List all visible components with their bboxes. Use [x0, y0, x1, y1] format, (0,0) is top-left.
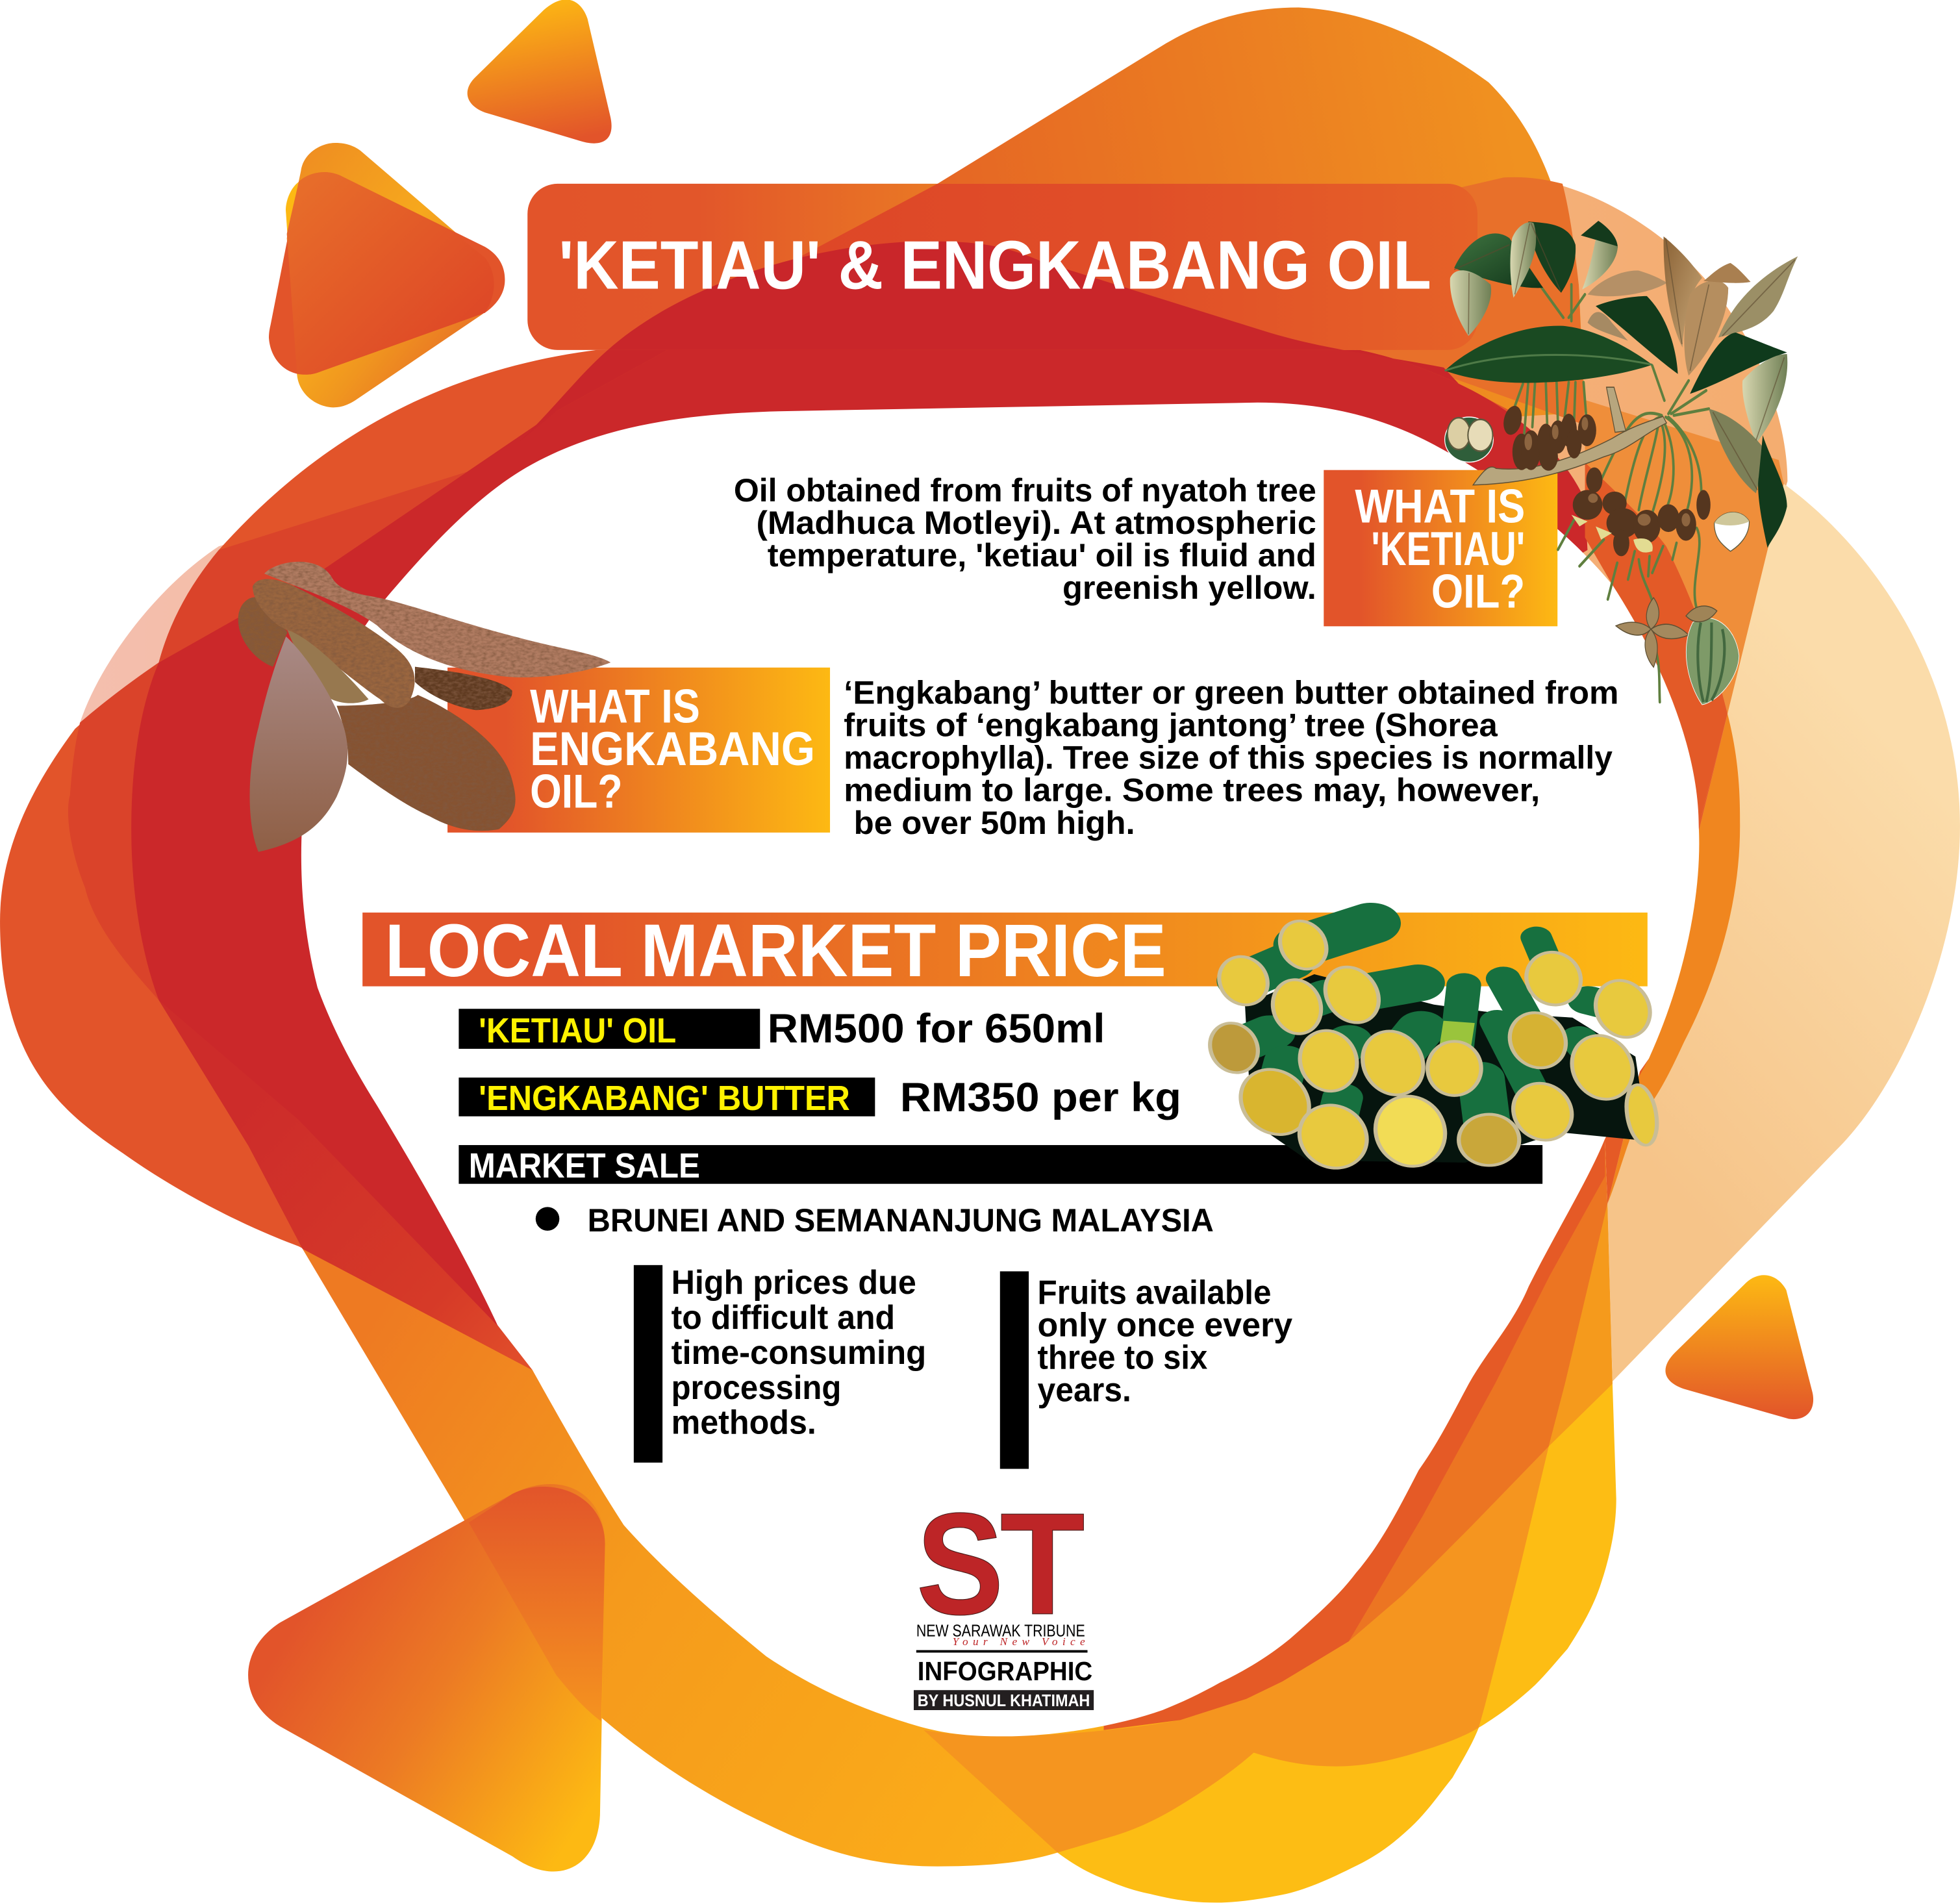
price row: engkabang butter: RM350 per kg: [900, 1075, 1181, 1120]
illustration: nyatoh tree branch: [1445, 221, 1798, 705]
note: fruit availability: years.: [1038, 1372, 1131, 1409]
background: band at straight edge: [1605, 714, 1728, 1204]
what is ketiau heading box: [1324, 470, 1557, 626]
triangle: upper left pair: [269, 143, 505, 407]
what is ketiau heading box: 'KETIAU': [1371, 523, 1525, 575]
what is engkabang text block: fruits of ‘engkabang jantong’ tree (Shorea: [844, 707, 1498, 744]
title bar: [527, 183, 1477, 350]
market sale bar: MARKET SALE: [469, 1146, 700, 1185]
what is ketiau text block: [734, 472, 1316, 606]
local market price banner: [362, 909, 1648, 992]
what is ketiau heading box: OIL?: [1431, 565, 1525, 618]
background: top peak overlap: [1041, 177, 1585, 425]
cut fruit: [1445, 417, 1493, 462]
background: lobe darker part: [1162, 1139, 1607, 1720]
background: lighter red tip: [158, 1000, 533, 1370]
logo: New Sarawak Tribune infographic: S: [916, 1483, 1004, 1645]
what is engkabang text block: [844, 675, 1619, 841]
price row: engkabang butter: [459, 1075, 1181, 1120]
what is engkabang text block: macrophylla). Tree size of this species is normally: [844, 740, 1613, 776]
what is ketiau text block: (Madhuca Motleyi). At atmospheric: [756, 505, 1316, 541]
what is ketiau heading box: WHAT IS: [1355, 481, 1525, 533]
price row: ketiau oil: RM500 for 650ml: [768, 1006, 1105, 1052]
background: pale pink to peach blob: [68, 177, 1787, 1345]
price row: ketiau oil: 'KETIAU' OIL: [479, 1011, 676, 1050]
background: peach orange right band: [1585, 400, 1784, 714]
green fruit: [1686, 606, 1739, 705]
triangle: right: [1665, 1275, 1813, 1419]
background: yellow-orange overlap at bottom: [923, 1720, 1254, 1852]
background: lower right lobe: [1162, 1204, 1607, 1767]
what is engkabang heading box: [447, 668, 830, 833]
cup seed: [1715, 512, 1750, 551]
background: orange top peak: [520, 8, 1585, 441]
background: red ring: [131, 340, 1587, 1370]
white central area: [301, 403, 1699, 1736]
logo: New Sarawak Tribune infographic: Your New Voice: [953, 1635, 1085, 1648]
note: fruit availability: [1000, 1271, 1292, 1469]
logo: New Sarawak Tribune infographic: [914, 1483, 1094, 1710]
background: orange-red right band: [1585, 462, 1728, 826]
note: high prices: [634, 1264, 926, 1463]
note: fruit availability: three to six: [1038, 1339, 1207, 1377]
logo: New Sarawak Tribune infographic: T: [1000, 1483, 1085, 1645]
note: high prices: time-consuming: [672, 1334, 926, 1372]
market sale bullet: BRUNEI AND SEMANANJUNG MALAYSIA: [588, 1202, 1214, 1239]
what is engkabang text block: be over 50m high.: [854, 805, 1135, 841]
background: darker overlap on left: [68, 411, 557, 1000]
what is engkabang text block: ‘Engkabang’ butter or green butter obtained from: [844, 675, 1619, 711]
logo: New Sarawak Tribune infographic: BY HUSNUL KHATIMAH: [918, 1691, 1090, 1710]
logo: New Sarawak Tribune infographic: NEW SARAWAK TRIBUNE: [916, 1620, 1085, 1640]
what is engkabang heading box: WHAT IS: [530, 680, 700, 733]
background: orange lower body: [158, 750, 1625, 1867]
note: fruit availability: Fruits available: [1038, 1274, 1271, 1311]
star flower: [1616, 598, 1689, 667]
background: orange-red ring: [0, 340, 1613, 1370]
illustration: engkabang winged fruit: [238, 562, 610, 852]
market sale bar: [459, 1145, 1542, 1185]
background: yellow lower lobe: [923, 1169, 1616, 1902]
what is engkabang heading box: OIL?: [530, 765, 623, 818]
title: 'KETIAU' & ENGKABANG OIL: [559, 227, 1431, 304]
note: high prices: processing: [672, 1369, 841, 1407]
what is engkabang heading box: ENGKABANG: [530, 723, 815, 775]
background: orange right curve: [1607, 714, 1740, 1204]
triangle: bottom left: [248, 1484, 605, 1872]
illustration: bamboo tubes of engkabang butter: [1205, 918, 1661, 1171]
note: high prices: High prices due: [672, 1264, 916, 1302]
what is ketiau text block: temperature, 'ketiau' oil is fluid and: [768, 537, 1316, 573]
logo: New Sarawak Tribune infographic: INFOGRAPHIC: [918, 1656, 1092, 1686]
note: high prices: methods.: [672, 1404, 816, 1442]
triangle: top: [468, 0, 612, 144]
leaves: [1445, 221, 1798, 548]
note: fruit availability: only once every: [1038, 1307, 1292, 1344]
background: red curve above ring: [520, 241, 1459, 441]
price row: ketiau oil: [459, 1006, 1105, 1052]
background: cream right blob: [1607, 484, 1960, 1381]
what is ketiau text block: greenish yellow.: [1062, 570, 1316, 606]
local market price banner: LOCAL MARKET PRICE: [385, 909, 1166, 992]
note: high prices: to difficult and: [672, 1299, 895, 1337]
price row: engkabang butter: 'ENGKABANG' BUTTER: [479, 1079, 850, 1118]
what is ketiau text block: Oil obtained from fruits of nyatoh tree: [734, 472, 1316, 509]
background: orange sliver near cream: [1549, 1204, 1613, 1446]
what is engkabang text block: medium to large. Some trees may, however,: [844, 772, 1540, 809]
background: orange-red band lower right: [1104, 1139, 1605, 1730]
